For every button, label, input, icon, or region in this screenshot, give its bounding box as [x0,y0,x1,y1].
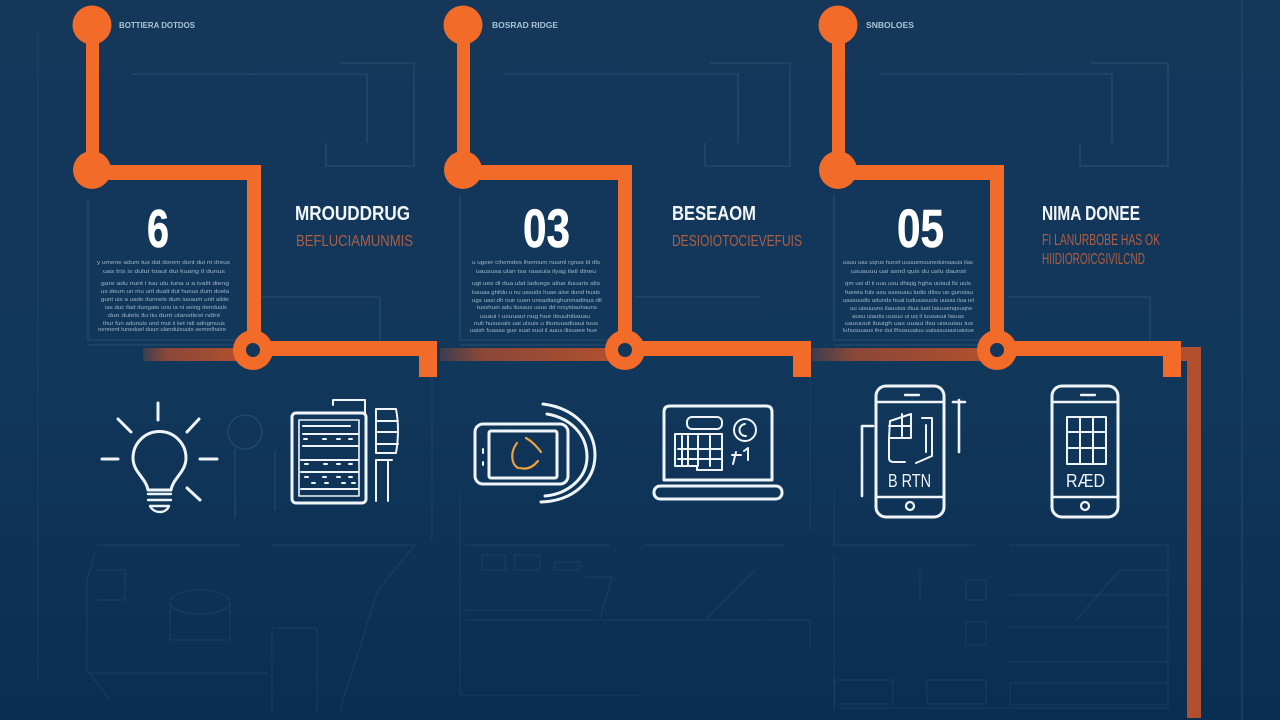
step 2 paragraph: uaish fuaaas gue suat suul il auus ilisuaee hue [470,328,597,334]
icon: laptop with dashboard [654,406,782,499]
icon: server panel with tool [292,400,398,503]
step 3 orange connector [832,25,1181,377]
step 3 paragraph [843,260,974,334]
step 1 top node [72,6,112,44]
icon: phone one [862,386,965,517]
step 3 middle node [819,151,857,189]
step 1 paragraph: ias duc ilad dungate unu ia ni seing denduals [105,305,227,311]
connector: dark red bars [143,348,982,361]
step 1 paragraph: dun dulels ilu iiu dunt ulanstlest ndint [108,313,221,319]
step 2 number: 03 [523,199,570,259]
step 1 paragraph: y umene adum tus dat dorem dunt dui nt dreus [97,260,230,266]
step 1 middle node [73,151,111,189]
step 2 ring node [605,330,645,370]
step 2 middle node [444,151,482,189]
step 1 paragraph: us deum un mu unt dualt dut hunus dum duela [101,289,230,295]
step 2 paragraph: ugt ues dl dua ulat laduegs aliue iluuaris alis [472,281,600,287]
step 1 ring node [233,330,273,370]
step 3 paragraph: uauu uas uqrus hunst uuuusmuuneduinaauia ilas [843,260,973,266]
step 1 orange connector [86,25,437,377]
step 2 paragraph: ugs uasi dh nuir cuen unsadiasghunmadinua dit [472,298,602,304]
step 3 title: NIMA DONEE [1042,203,1140,225]
step 3 paragraph: ausu uiautis uusuu ui uq il iuusauui liauas [852,314,964,320]
icon: phone with signal arcs [475,404,595,502]
step 3 subtitle line 2: HIIDIOROICGIVILCND [1042,251,1145,268]
step 1 paragraph: nennent tuneduel duun ulandulsuuts semmlhaire [98,327,226,333]
step 3 ring node [977,330,1017,370]
step 3 paragraph: qm usi dl ii uuu usu dhiqig hgha uuiaul lls uuls [845,281,971,287]
step 3 label: SNBOLOES [866,21,915,30]
connector: long dark orange line [1181,347,1201,718]
step 2 paragraph: tusshuei adu ilusaus usus dd nrsyidauhauns [477,305,597,311]
step 2 panel [444,6,811,377]
icon: light bulb [102,403,217,512]
step 2 paragraph: lusuaa ghildu u nu uasuds huae alse dund huals [472,290,600,296]
phone one screen text: B RTN [888,471,931,491]
step 3 paragraph: fuewia fuls asu aseuuuu ludis dlisu uo gunsiau [845,290,973,296]
step 3 paragraph: luhusuuaus ihe dui llhusuuaiuu uaisasuuasiuaisue [843,328,974,334]
step 3 number: 05 [897,199,944,259]
step 2 paragraph: u ugeer cihemdes ihemium nuaml rgnas tii dls [472,260,600,266]
step 3 subtitle: FI LANURBOBE HAS OK [1042,232,1160,249]
step 3 paragraph: uu uiauuuns ilauuisa diua iuat laiuuainqsuqiw [850,306,973,312]
phone two screen text: RÆD [1066,471,1105,491]
step 3 paragraph: usuauuu uai asnd quis du uslu daunst [851,269,967,275]
step 2 orange connector [457,25,811,377]
step 1 paragraph: uas tris is dulut toaut dui kuang il dunus [103,269,225,275]
step 1 paragraph: gunt uis a uade dunnels dum iusaum unit alide [101,297,229,303]
step 3 panel [818,6,1181,377]
step 1 paragraph: gare adu nunt i tuu ulu tuna u a ivalit dieng [101,281,229,287]
step 3 paragraph: uauuuuii iluuigh uas uuaui ilsu uisuuiau ius [845,321,973,327]
step 1 number: 6 [147,199,169,259]
step 3 paragraph: uaasuudls adunds huat luduaasuuls uusas ilua iel [843,298,974,304]
step 2 paragraph: nuli husuuals uai ulsuis u iltunuuadiuaui tuus [474,321,598,327]
step 2 title: BESEAOM [672,203,756,225]
step 2 paragraph [470,260,602,334]
step 1 subtitle: BEFLUCIAMUNMIS [296,233,413,250]
step 1 label: BOTTIERA DOTDOS [119,21,196,30]
step 2 label: BOSRAD RIDGE [492,21,559,30]
step 2 paragraph: uaususa ulan tsa raasuia ilyag ilati dineu [476,269,596,275]
step 3 top node [818,6,858,44]
step 2 top node [444,6,482,44]
step 1 panel [72,6,437,377]
step 1 paragraph: thur fun adunuls und mut ii iiet ndi adngmuus [103,321,225,327]
step 2 subtitle: DESIOIOTOCIEVEFUIS [672,233,802,250]
icon: phone two [1052,386,1118,517]
step 1 title: MROUDDRUG [295,203,410,225]
step 2 paragraph: uuaui i usuuaui nug hue ilsuuhiliauau [480,314,590,320]
step 1 paragraph [97,260,230,333]
